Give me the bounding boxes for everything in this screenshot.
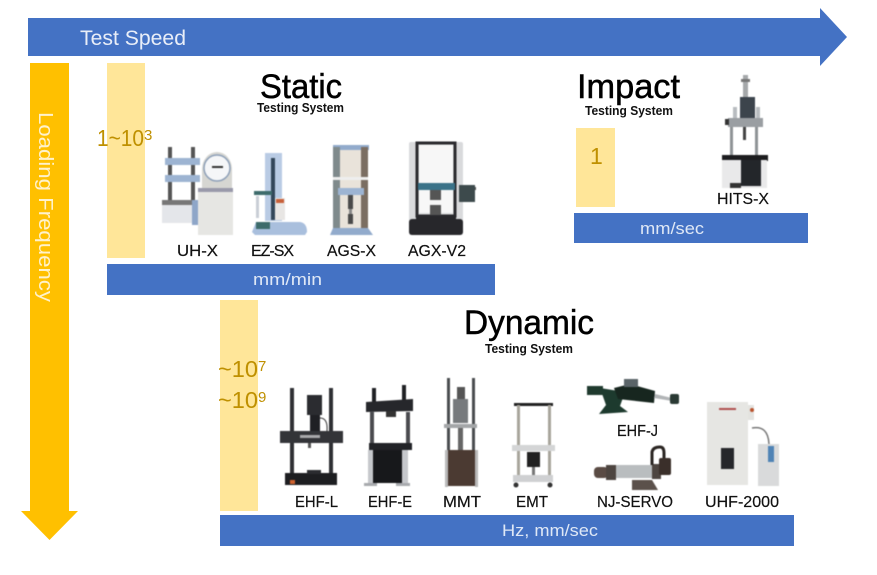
label: EMT: EMT	[516, 494, 548, 511]
label: UH-X: UH-X	[177, 243, 218, 260]
machine: MMT	[444, 378, 478, 487]
static range bar: 1~10	[97, 125, 144, 151]
dynamic range bar: 7	[258, 358, 266, 375]
dynamic unit bar	[220, 515, 794, 546]
machine: AGX-V2	[409, 142, 476, 235]
impact unit bar	[574, 213, 808, 243]
arrow: loading frequency: Loading Frequency	[34, 112, 56, 302]
static unit bar: mm/min	[253, 271, 322, 289]
machine: EHF-L	[280, 388, 343, 485]
label: EHF-J: EHF-J	[617, 423, 658, 440]
dynamic range bar: 9	[258, 389, 266, 406]
machine: EMT	[512, 403, 555, 488]
machine: EHF-J	[587, 379, 679, 414]
dynamic heading: Testing System	[485, 342, 573, 356]
label: NJ-SERVO: NJ-SERVO	[597, 494, 673, 511]
arrow: loading frequency	[21, 63, 78, 540]
machine: AGS-X	[330, 145, 373, 235]
dynamic range bar	[218, 300, 266, 511]
impact heading: Testing System	[585, 104, 673, 118]
label: AGX-V2: AGX-V2	[408, 243, 466, 260]
dynamic unit bar: Hz, mm/sec	[502, 522, 598, 540]
label: MMT: MMT	[443, 494, 481, 511]
panel: dynamic	[218, 300, 794, 546]
static unit bar	[107, 264, 495, 295]
label: EHF-L: EHF-L	[295, 494, 338, 511]
impact unit bar: mm/sec	[640, 220, 704, 238]
machine: NJ-SERVO	[594, 447, 671, 490]
label: AGS-X: AGS-X	[327, 243, 376, 260]
label: EHF-E: EHF-E	[368, 494, 412, 511]
static range bar: 3	[144, 127, 152, 144]
impact heading: Impact	[577, 68, 681, 106]
label: HITS-X: HITS-X	[717, 191, 769, 208]
machine: UH-X	[162, 147, 233, 235]
arrow: test speed: Test Speed	[80, 27, 186, 50]
static range bar	[97, 63, 152, 258]
dynamic range bar: ~10	[218, 387, 258, 413]
static heading: Testing System	[257, 101, 344, 115]
machine: HITS-X	[722, 75, 768, 188]
panel: static	[97, 63, 495, 295]
machine: UHF-2000	[707, 402, 779, 486]
arrow: test speed	[28, 8, 847, 66]
static heading: Static	[260, 68, 342, 106]
label: EZ-SX: EZ-SX	[251, 243, 294, 260]
impact range bar	[576, 128, 615, 207]
label: UHF-2000: UHF-2000	[705, 494, 779, 511]
machine: EHF-E	[364, 385, 413, 486]
panel: impact	[574, 68, 808, 243]
machine: EZ-SX	[252, 153, 307, 235]
dynamic heading: Dynamic	[464, 304, 594, 342]
dynamic range bar: ~10	[218, 356, 258, 382]
impact range bar: 1	[590, 143, 603, 169]
